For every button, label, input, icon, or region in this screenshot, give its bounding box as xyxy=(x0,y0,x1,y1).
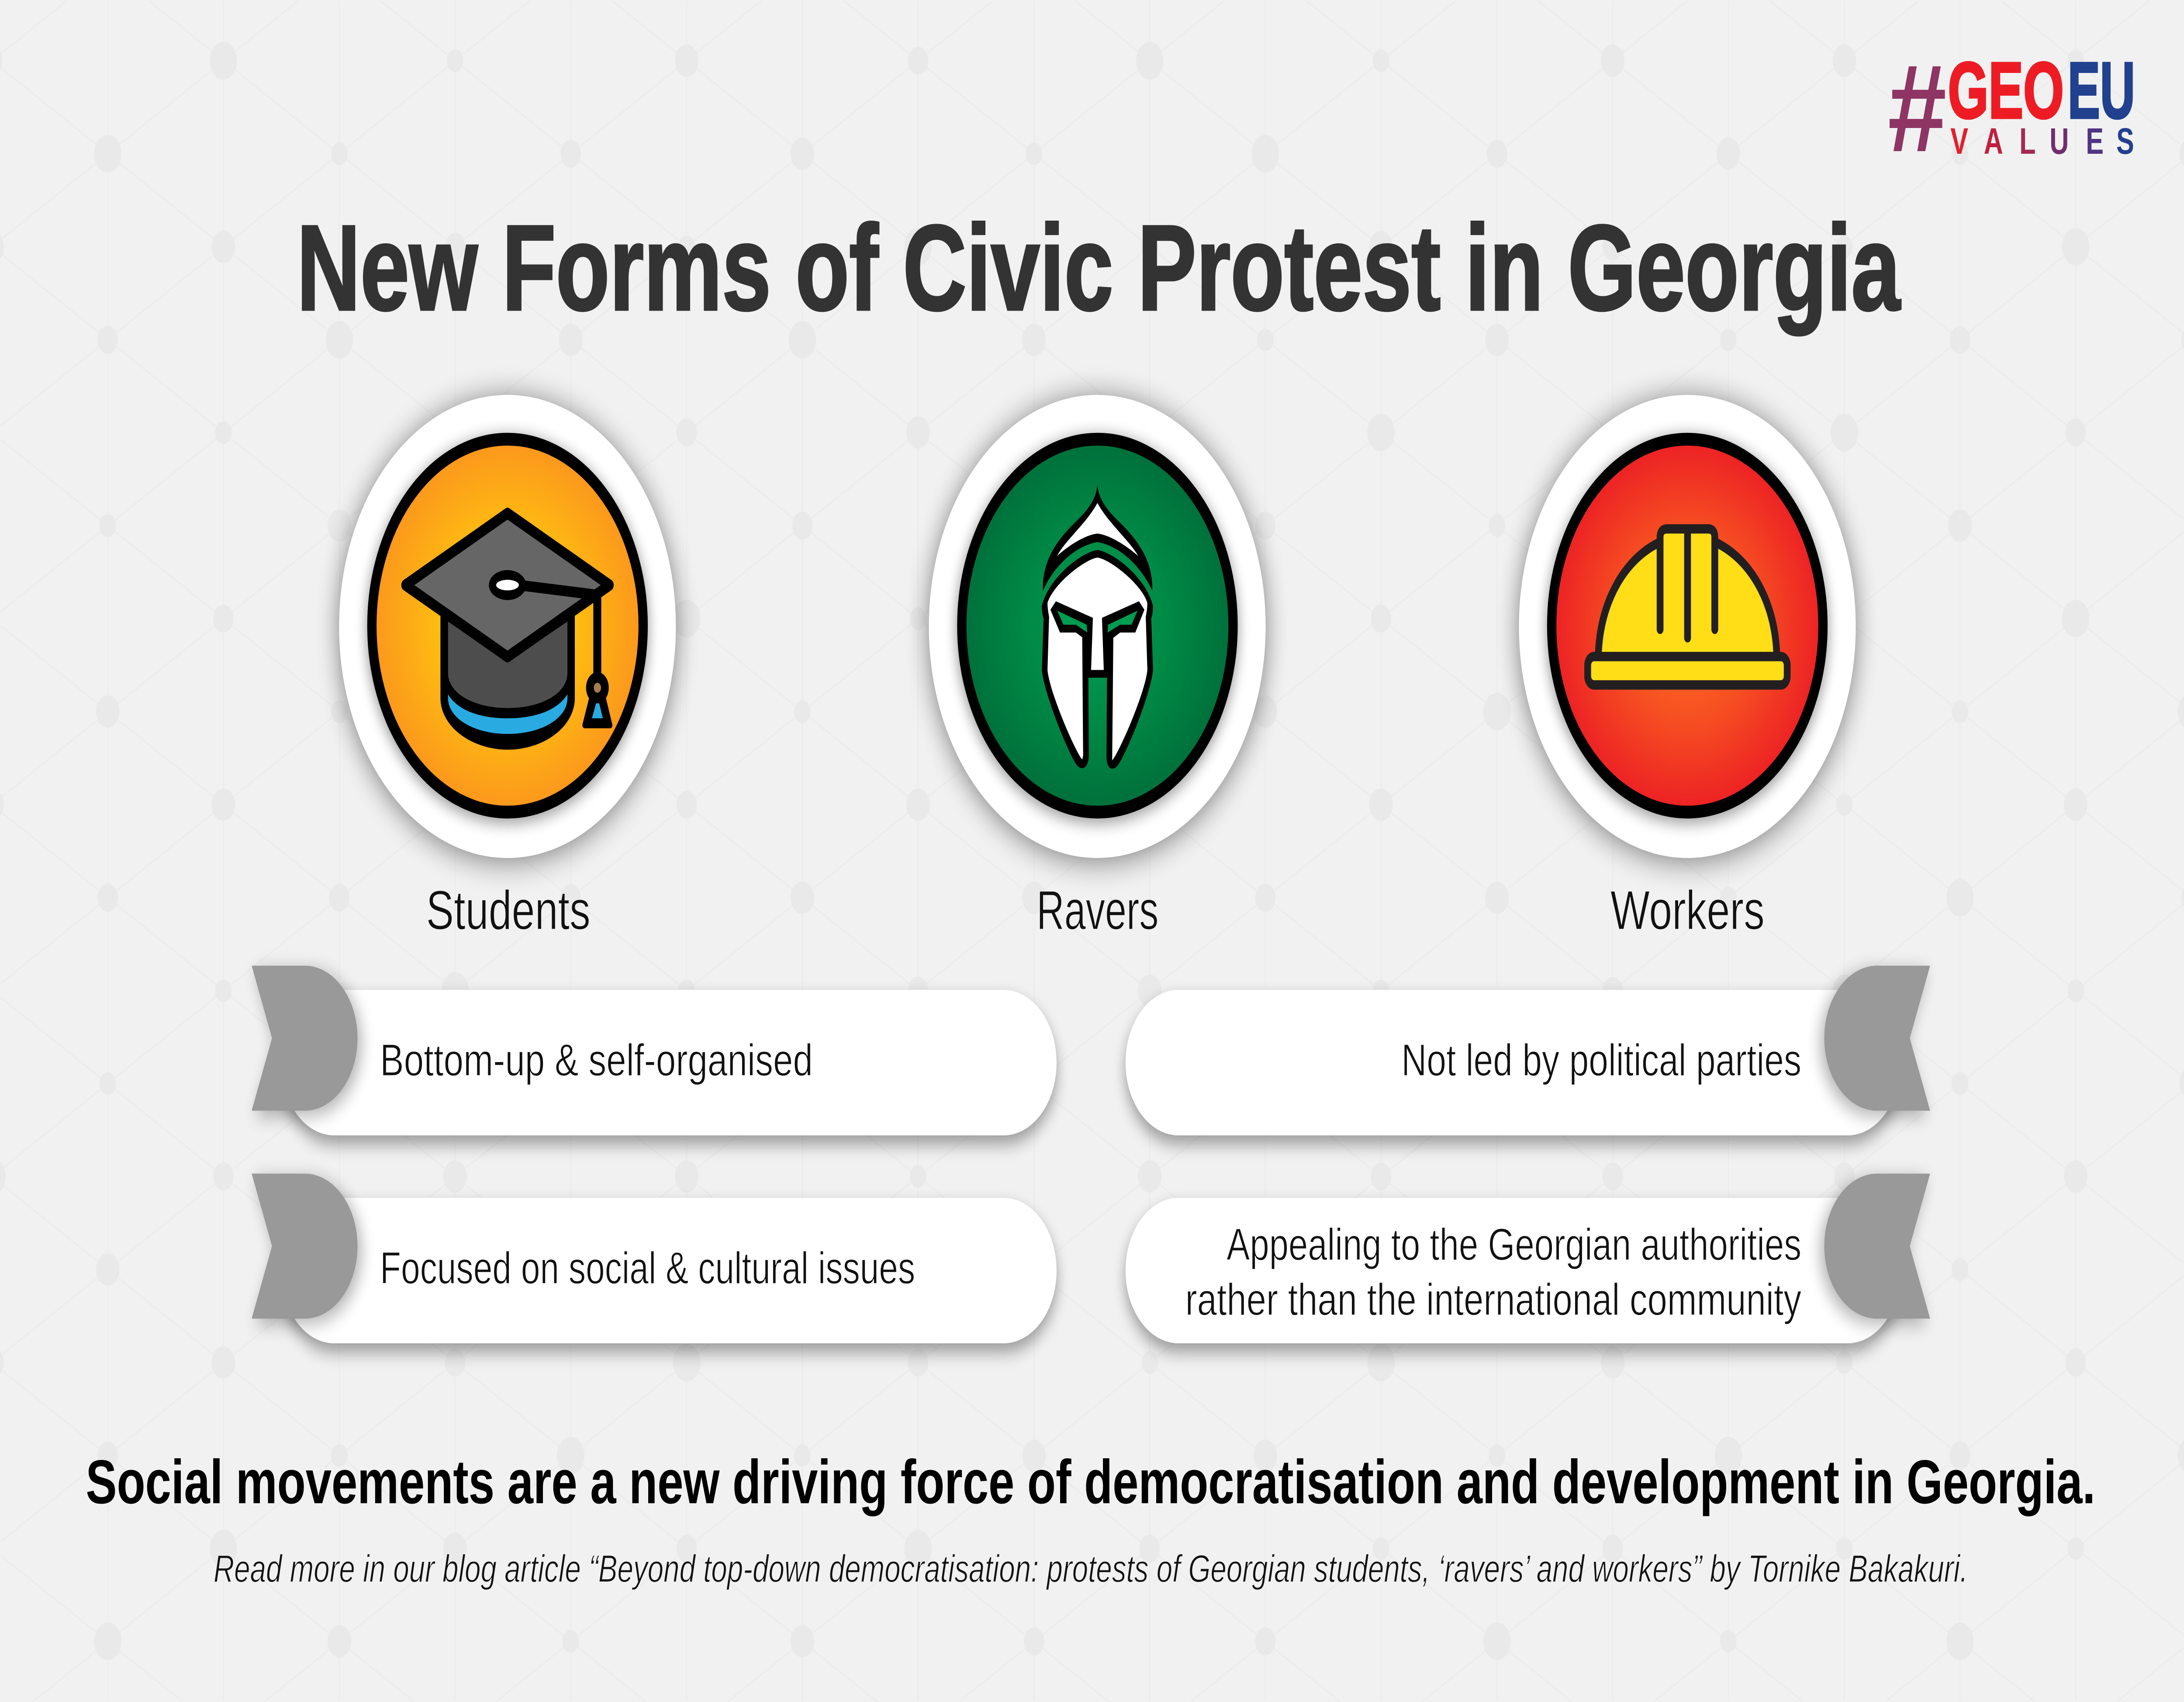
logo: #GEOEU Values: V xyxy=(1950,121,1968,162)
conclusion heading: Social movements are a new driving force of democratisation and development in Georgia. xyxy=(86,1448,2095,1517)
icon: hard hat xyxy=(1552,439,1823,812)
logo: #GEOEU Values: L xyxy=(2019,121,2035,162)
panel: focused ribbon xyxy=(252,1173,1057,1352)
logo: #GEOEU Values: E xyxy=(2086,121,2104,162)
panel: bottom-up ribbon xyxy=(252,965,1057,1144)
icon: spartan helmet xyxy=(962,439,1233,812)
title: New Forms of Civic Protest in Georgia xyxy=(297,200,1901,336)
chevron marker xyxy=(1824,1173,1930,1318)
label: ravers: Ravers xyxy=(1037,880,1158,941)
chevron marker xyxy=(252,1173,357,1318)
text: appealing: Appealing to the Georgian authorities xyxy=(1227,1219,1801,1270)
label: students: Students xyxy=(426,880,591,941)
text: not led: Not led by political parties xyxy=(1401,1035,1801,1086)
text: focused: Focused on social & cultural issues xyxy=(380,1243,915,1294)
text: bottom-up: Bottom-up & self-organised xyxy=(380,1035,813,1086)
logo: #GEOEU Values: A xyxy=(1984,121,2003,162)
panel: appealing ribbon xyxy=(1126,1173,1930,1352)
text: appealing xyxy=(1185,1219,1801,1325)
panel: not led ribbon xyxy=(1126,965,1930,1144)
chevron marker xyxy=(1824,965,1930,1110)
label: workers: Workers xyxy=(1610,880,1765,941)
logo: #GEOEU Values xyxy=(1886,38,2135,178)
logo: #GEOEU Values: # xyxy=(1886,38,1945,178)
chevron marker xyxy=(252,965,357,1110)
logo: #GEOEU Values: GEO xyxy=(1948,45,2064,135)
source note: Read more in our blog article “Beyond top-down democratisation: protests of Georgian students, ‘ravers’ and workers” by Tornike Bakakuri. xyxy=(214,1547,1968,1590)
logo: #GEOEU Values: EU xyxy=(2068,45,2135,135)
text: appealing: rather than the international community xyxy=(1185,1274,1801,1325)
panel: ravers badge xyxy=(929,395,1266,861)
panel: workers badge xyxy=(1519,395,1856,861)
logo: #GEOEU Values: S xyxy=(2116,121,2134,162)
panel: students badge xyxy=(339,395,676,861)
logo: #GEOEU Values: U xyxy=(2049,121,2069,162)
icon: graduation cap xyxy=(372,439,643,812)
